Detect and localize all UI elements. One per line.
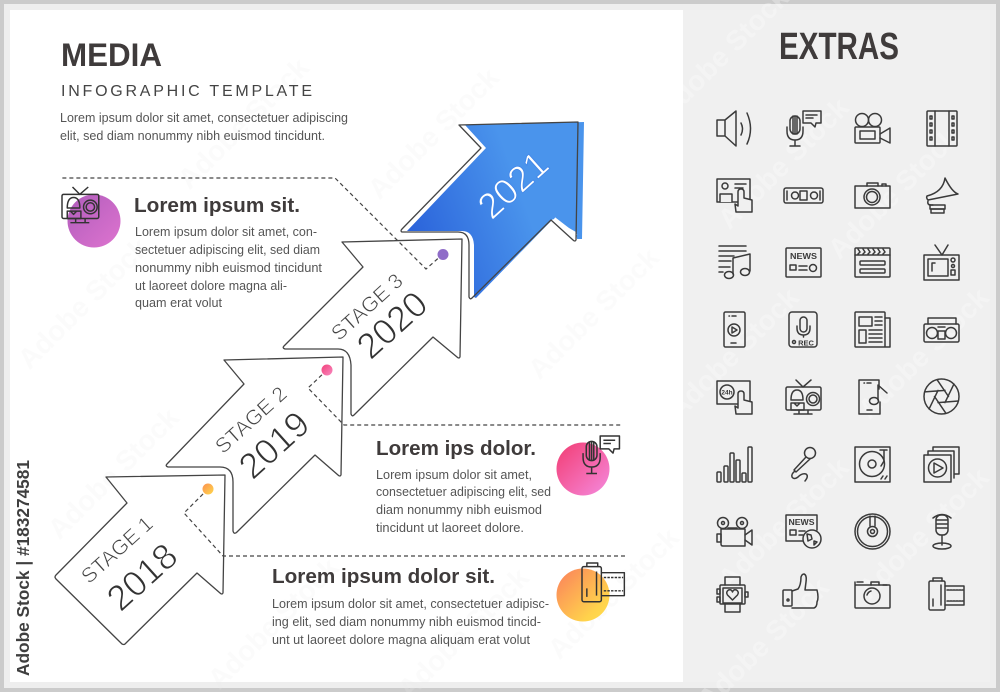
- heading: Lorem ipsum dolor sit.: [272, 566, 495, 588]
- text: Adobe Stock: [822, 122, 965, 265]
- icon: aperture: [924, 379, 959, 414]
- icon: tape deck: [784, 188, 823, 203]
- icon: phone play: [724, 312, 745, 347]
- text: Adobe Stock: [42, 402, 185, 545]
- label: stage 3: STAGE 3: [327, 269, 408, 345]
- icon: gramophone: [927, 178, 958, 213]
- text: Adobe Stock: [202, 552, 345, 692]
- panel: section 1: [62, 187, 323, 310]
- text: Adobe Stock: [712, 92, 855, 235]
- heading: Lorem ips dolor.: [376, 438, 536, 460]
- icon: media tv: [786, 380, 821, 414]
- icon: compact disc: [855, 514, 890, 549]
- icon: karaoke microphone: [792, 448, 816, 481]
- text: Adobe Stock: [712, 452, 855, 595]
- arrow: stage 3 2020: 2020: [349, 283, 435, 367]
- icon: thumbs up: [783, 574, 818, 608]
- text: Adobe Stock: [662, 282, 805, 425]
- icon: movie camera: [855, 114, 890, 143]
- body text: tincidunt ut laoreet dolore.: [376, 521, 524, 535]
- body text: [272, 597, 549, 647]
- panel: section 2: [376, 436, 619, 535]
- icon: play stack: [924, 447, 959, 482]
- text: Adobe Stock: [852, 282, 995, 425]
- icon: tv: [924, 245, 959, 280]
- body text: Lorem ipsum dolor sit amet, con-: [135, 225, 317, 239]
- icon: film camera: [717, 518, 752, 546]
- icon: boombox: [924, 318, 959, 342]
- dot: orange: [202, 484, 214, 494]
- text: Adobe Stock: [522, 242, 665, 385]
- body text: [135, 225, 323, 310]
- panel: section 3: [272, 563, 624, 647]
- intro text: [60, 111, 348, 143]
- icon: photo camera: [855, 183, 890, 208]
- icon: film roll: [929, 578, 964, 610]
- icon: news: NEWS: [790, 252, 818, 261]
- text: Adobe Stock: [542, 522, 685, 665]
- body text: [376, 468, 551, 535]
- icon grid: [717, 111, 964, 612]
- arrow: 2021 blue: 2021: [470, 143, 556, 227]
- arrow: stage 3 2020: [283, 239, 462, 416]
- icon: speaker: [717, 111, 750, 146]
- stock id vertical text: Adobe Stock | #183274581: [13, 460, 33, 676]
- icon: rec: [789, 312, 817, 348]
- icon: compact camera: [855, 582, 890, 608]
- icon: turntable: [855, 447, 890, 482]
- icon: film roll: [582, 563, 624, 602]
- body text: sectetuer adipiscing elit, sed diam: [135, 243, 320, 257]
- icon: media tv: [62, 187, 99, 223]
- dashed connectors: [60, 178, 625, 556]
- icon: news globe: NEWS: [788, 518, 815, 527]
- body text: ing elit, sed diam nonummy nibh euismod tincid-: [272, 615, 541, 629]
- title: MEDIA: [61, 37, 162, 73]
- icon: smart watch: [717, 577, 748, 612]
- intro text: elit, sed diam nonummy nibh euismod tincidunt.: [60, 129, 325, 143]
- text: Adobe Stock: [362, 62, 505, 205]
- label: stage 1: STAGE 1: [77, 512, 158, 588]
- arrow: stage 2 2019: 2019: [231, 403, 317, 487]
- subtitle: INFOGRAPHIC TEMPLATE: [61, 83, 312, 100]
- icon: phone note: [859, 380, 887, 414]
- label: stage 2: STAGE 2: [211, 382, 292, 458]
- icon: newspaper: [855, 312, 890, 347]
- icon: circle: [556, 568, 610, 622]
- body text: unt ut laoreet dolore magna aliquam erat volut: [272, 633, 531, 647]
- icon: circle: [68, 194, 120, 248]
- heading: extras: EXTRAS: [779, 26, 899, 68]
- icon: 24h touch: 24h: [721, 390, 733, 396]
- body text: nonummy nibh euismod tincidunt: [135, 261, 323, 275]
- dot: purple: [438, 249, 448, 260]
- icon: circle: [556, 442, 610, 496]
- arrow: stage 2 2019: [166, 357, 343, 533]
- icon: microphone with bubble: [787, 111, 821, 146]
- icon: signal bars: [717, 447, 752, 482]
- icon: news: [786, 248, 821, 277]
- body text: consectetuer adipiscing elit, sed: [376, 485, 551, 499]
- icon: news globe: [786, 515, 821, 548]
- icon: presentation touch: [717, 179, 752, 212]
- icon: film strip: [927, 111, 957, 146]
- arrow: stage 1 2018: 2018: [99, 535, 185, 619]
- text: Adobe Stock: [12, 232, 155, 375]
- arrow: 2021 blue: [401, 122, 584, 299]
- icon: 24h touch: [717, 381, 752, 414]
- icon: clapperboard: [855, 248, 890, 277]
- text: Adobe Stock: [172, 52, 315, 195]
- heading: Lorem ipsum sit.: [134, 195, 300, 217]
- body text: quam erat volut: [135, 296, 223, 310]
- icon: microphone with bubble: [583, 436, 619, 473]
- icon: rec: REC: [798, 338, 814, 348]
- body text: ut laoreet dolore magna ali-: [135, 279, 287, 293]
- arrow: stage 1 2018: [55, 475, 225, 644]
- icon: retro microphone: [933, 514, 951, 549]
- body text: diam nonummy nibh euismod: [376, 503, 542, 517]
- text: Adobe Stock: [852, 462, 995, 605]
- dot: pink: [322, 364, 332, 376]
- body text: Lorem ipsum dolor sit amet,: [376, 468, 532, 482]
- intro text: Lorem ipsum dolor sit amet, consectetuer adipiscing: [60, 111, 348, 125]
- icon: music list: [719, 246, 750, 278]
- body text: Lorem ipsum dolor sit amet, consectetuer adipisc-: [272, 597, 549, 611]
